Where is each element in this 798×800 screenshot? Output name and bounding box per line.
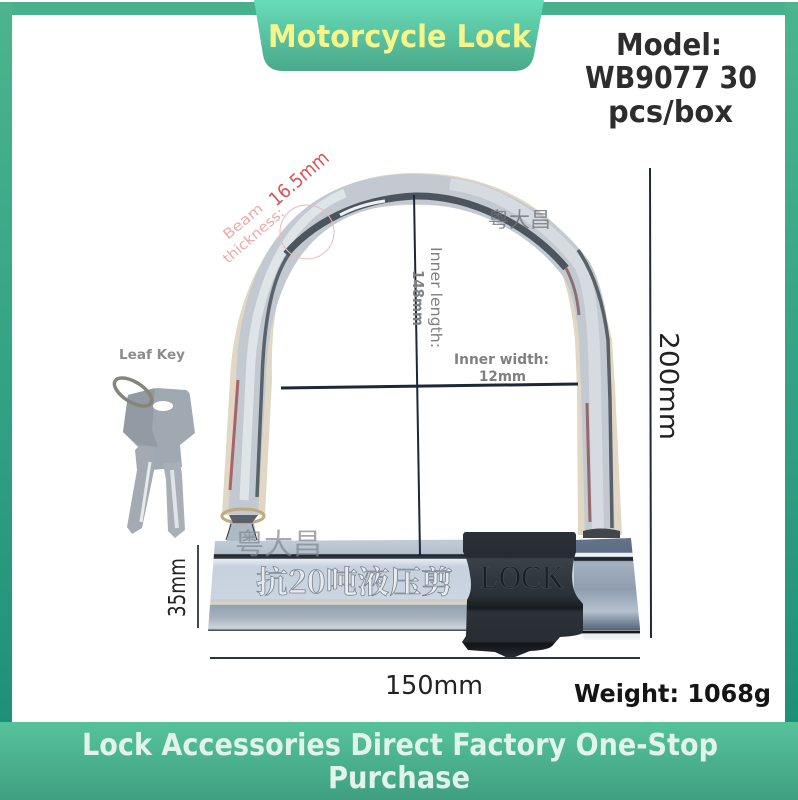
right end of bar (574, 538, 640, 640)
label: inner width (454, 352, 549, 385)
label: 35mm: 35mm (165, 558, 191, 617)
lock bar (208, 538, 640, 640)
label: leaf key: Leaf Key (119, 347, 185, 363)
watermark: lower left: 粤大昌 (235, 521, 322, 563)
dimension line: bar height (197, 545, 199, 628)
label: 150mm: 150mm (385, 671, 483, 701)
label: inner length: Inner length: (427, 247, 445, 348)
dimension line: inner length (414, 195, 420, 555)
watermark: upper right: 粤大昌 (488, 204, 551, 234)
label: inner length: 148mm (409, 270, 427, 326)
title tab (254, 0, 544, 71)
label: beam thickness: Beam (220, 201, 267, 243)
title text: Motorcycle Lock (268, 19, 532, 55)
label: 200mm: 200mm (653, 332, 683, 440)
label: beam thickness (220, 147, 334, 267)
label: weight: Weight: 1068g (574, 679, 771, 708)
model text block (585, 28, 757, 130)
model text block: pcs/box (608, 95, 733, 130)
lock shackle (222, 173, 622, 535)
dimension line: height 200mm (650, 168, 651, 638)
label: beam thickness: thickness: (220, 205, 288, 267)
label: inner length (409, 247, 445, 348)
dimension line: inner width (281, 384, 578, 388)
label: inner width: Inner width: (454, 352, 549, 368)
banner text: Lock Accessories Direct Factory One-Stop (82, 728, 718, 763)
black lock body (462, 532, 583, 659)
bottom banner (0, 722, 798, 800)
dimension line: width 150mm (210, 657, 640, 659)
model text block: WB9077 30 (585, 61, 757, 96)
label: inner width: 12mm (479, 369, 526, 385)
banner text: Purchase (328, 761, 470, 796)
bar engraving: 抗20吨液压剪 (256, 557, 453, 602)
model text block: Model: (616, 28, 722, 63)
shackle collars (222, 509, 620, 545)
LOCK label: LOCK (480, 560, 564, 596)
label: beam thickness: 16.5mm (265, 147, 334, 211)
banner text (82, 728, 718, 796)
icon: keys (110, 372, 195, 538)
